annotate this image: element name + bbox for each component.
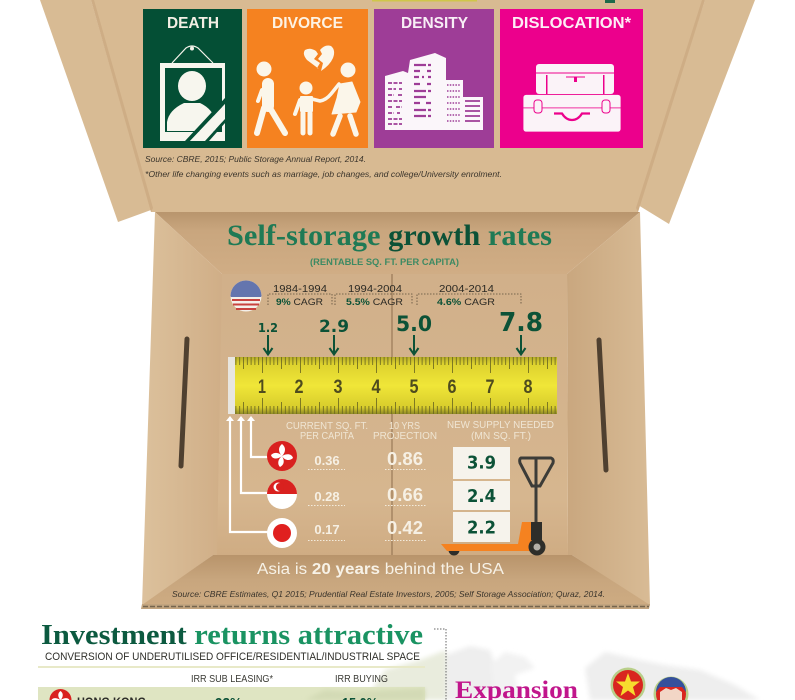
clipped heading remnant (372, 0, 615, 3)
projection values: 0.86 (387, 448, 423, 469)
icon: Hong Kong flag (267, 441, 297, 471)
icon: Cambodia flag (654, 676, 688, 700)
header: projection (373, 421, 437, 442)
tape numbers (258, 377, 532, 398)
open cardboard box (40, 0, 755, 609)
returns table header (191, 674, 388, 685)
tape numbers: 6 (448, 377, 456, 398)
icon: broken heart (304, 46, 334, 71)
inner top band (155, 212, 640, 274)
period 1984-1994: 1984-1994 (273, 284, 327, 295)
value 1.2 (258, 321, 278, 354)
dislocation label: DISLOCATION* (512, 15, 632, 32)
right box flap (638, 0, 755, 224)
box 2.4: 2.4 (467, 486, 496, 507)
panel: density (374, 9, 494, 148)
back box flap (91, 0, 705, 212)
growth values with arrows (258, 308, 543, 354)
icon: US flag (230, 280, 262, 312)
header: new supply: (MN SQ. FT.) (471, 431, 531, 442)
footnote: *Other life changing events such as marriage, job changes, and college/University enrolment. (145, 169, 502, 179)
header: current (286, 421, 368, 442)
callout: Asia behind USA: Asia is 20 years behind the USA (257, 561, 505, 578)
value 2.9 (319, 317, 349, 354)
white connector arrows (226, 416, 270, 532)
icon: stacked suitcases (523, 64, 621, 132)
icon: Japan flag (267, 518, 297, 548)
header: projection: 10 YRS (389, 421, 420, 432)
left inner wall (142, 212, 222, 606)
heading: self-storage growth rates: Self-storage growth rates (227, 219, 552, 252)
box floor (142, 555, 650, 605)
icon: pallet jack (441, 458, 553, 556)
header: projection: PROJECTION (373, 431, 437, 442)
tape numbers: 8 (524, 377, 532, 398)
back inner wall (217, 274, 568, 556)
tape numbers: 2 (294, 377, 304, 398)
box 3.9: 3.9 (467, 452, 496, 474)
returns table header: IRR BUYING (335, 674, 388, 685)
value 7.8: 7.8 (499, 308, 543, 338)
icon: Vietnam flag (610, 668, 646, 700)
panel: dislocation (500, 9, 643, 148)
front corrugated edge (141, 604, 650, 609)
tape numbers: 5 (410, 377, 419, 398)
value 2.9: 2.9 (319, 317, 349, 337)
header: new supply (447, 420, 554, 442)
tape numbers: 4 (372, 377, 381, 398)
left box flap (40, 0, 151, 222)
projection values (387, 448, 423, 538)
icon: separated family (256, 62, 360, 134)
subheading: conversion: CONVERSION OF UNDERUTILISED OFFICE/RESIDENTIAL/INDUSTRIAL SPACE (45, 651, 420, 663)
value 5.0 (396, 312, 432, 354)
CAGR timeline (268, 284, 521, 308)
divorce label: DIVORCE (272, 15, 343, 32)
stacked supply boxes (453, 447, 510, 542)
period 1994-2004: 5.5% CAGR (346, 297, 403, 308)
current per capita values: 0.36 (314, 453, 340, 468)
right hand slot (599, 340, 606, 470)
subheading: (RENTABLE SQ. FT. PER CAPITA) (310, 257, 459, 268)
header: current: PER CAPITA (300, 431, 354, 442)
source note: growth: Source: CBRE Estimates, Q1 2015; Prudential Real Estate Investors, 2005; Self Storage Association; Quraz, 2014. (172, 589, 605, 599)
table column headers (286, 420, 554, 442)
current per capita values: 0.28 (314, 489, 340, 504)
right inner wall (567, 212, 650, 606)
tape measure (228, 357, 557, 414)
death label: DEATH (167, 15, 219, 32)
period 1994-2004 (335, 284, 412, 308)
tape numbers: 7 (486, 377, 494, 398)
header: current: CURRENT SQ. FT. (286, 421, 368, 432)
value 5.0: 5.0 (396, 312, 432, 336)
returns table header: IRR SUB LEASING* (191, 674, 273, 685)
projection values: 0.42 (387, 517, 423, 538)
value 1.2: 1.2 (258, 321, 278, 335)
period 1994-2004: 1994-2004 (348, 284, 402, 295)
period 1984-1994 (268, 284, 332, 308)
current per capita values: 0.17 (314, 522, 340, 537)
period 2004-2014: 2004-2014 (439, 284, 494, 295)
value 7.8 (499, 308, 543, 354)
heading: investment returns attractive: Investment returns attractive (41, 619, 423, 651)
returns table row: Hong Kong (38, 687, 425, 700)
tape numbers: 3 (334, 377, 342, 398)
box 2.2: 2.2 (467, 518, 496, 538)
icon: framed portrait (160, 46, 225, 141)
period 1984-1994: 9% CAGR (276, 297, 323, 308)
icon: Singapore flag (267, 479, 297, 509)
projection values: 0.66 (387, 484, 423, 505)
background map (365, 646, 760, 700)
icon: city buildings (385, 53, 483, 130)
left hand slot (181, 339, 187, 466)
panel: death (143, 9, 242, 148)
period 2004-2014 (417, 284, 521, 308)
header: new supply: NEW SUPPLY NEEDED (447, 420, 554, 431)
tape numbers: 1 (258, 377, 266, 398)
panel: divorce (247, 9, 368, 148)
source note: Source: CBRE, 2015; Public Storage Annual Report, 2014. (145, 154, 366, 164)
period 2004-2014: 4.6% CAGR (437, 297, 495, 308)
current per capita values (314, 453, 340, 537)
density label: DENSITY (401, 15, 468, 32)
